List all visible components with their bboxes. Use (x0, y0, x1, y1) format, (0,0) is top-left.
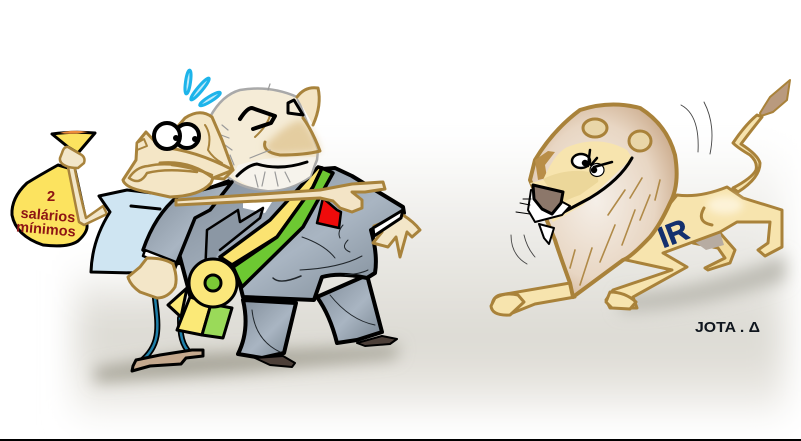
front leg (492, 283, 575, 314)
left sleeve (143, 182, 232, 270)
sweat marks (184, 70, 222, 107)
mane strokes (570, 178, 660, 285)
lion body (606, 187, 782, 308)
paws (491, 292, 636, 315)
lion jaw line (540, 158, 632, 218)
ear (297, 88, 319, 125)
small man head (123, 113, 233, 197)
brows and mouth (237, 100, 307, 176)
small man arm and hand (68, 165, 107, 225)
lion nose (533, 185, 563, 214)
motion lines (511, 102, 712, 264)
right hand (373, 215, 420, 257)
lion tail (733, 115, 762, 192)
lion face (530, 141, 632, 222)
lapel (205, 208, 263, 275)
left hand (128, 258, 176, 298)
signature: JOTA . Δ (695, 319, 760, 336)
rosette (189, 259, 237, 307)
jacket details (252, 225, 375, 352)
tail tuft (760, 80, 790, 116)
sash tails (168, 288, 232, 338)
lion (491, 80, 790, 315)
jacket (178, 168, 404, 310)
mane (530, 104, 677, 297)
lion eyes (572, 150, 612, 176)
left cuff (143, 250, 176, 268)
small man legs (140, 298, 190, 362)
hind leg far (693, 233, 735, 270)
pointing arm (176, 182, 385, 212)
shirt collar (243, 198, 272, 213)
left trouser leg (238, 300, 296, 358)
IR label: IR (654, 213, 694, 255)
president (128, 84, 420, 367)
hair and beard strokes (221, 84, 290, 187)
small man (12, 131, 203, 371)
small man shirt (91, 190, 192, 273)
mane tuft (535, 151, 555, 180)
sash (220, 167, 333, 287)
bag label: salários (20, 206, 76, 226)
bag label: 2 (47, 188, 55, 205)
money bag (12, 131, 95, 246)
lion muzzle (528, 190, 570, 222)
shoes (255, 336, 397, 367)
pocket square (317, 198, 341, 228)
head (210, 84, 320, 190)
right trouser leg (317, 275, 382, 343)
lion ears (583, 119, 651, 151)
lion fang (539, 224, 554, 244)
whiskers (516, 199, 531, 214)
right cuff (373, 210, 403, 236)
small man shoes (132, 350, 203, 371)
bag label (16, 188, 76, 241)
bag label: mínimos (16, 219, 76, 241)
nose (264, 120, 320, 155)
eyes (154, 123, 199, 149)
